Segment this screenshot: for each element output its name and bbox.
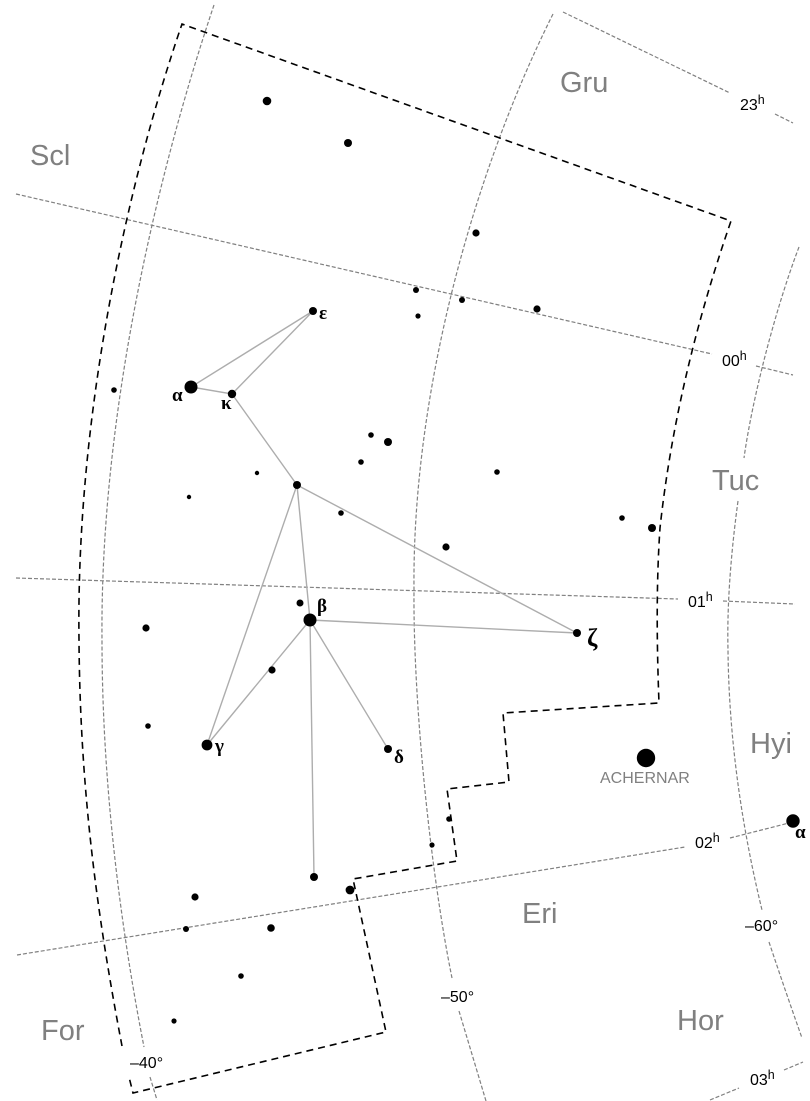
coordinate labels: 01 xyxy=(688,594,706,611)
Greek letter star labels: β xyxy=(317,596,327,617)
neighbouring constellation names: For xyxy=(41,1015,85,1047)
coordinate labels: –60° xyxy=(745,918,778,935)
Greek letter star labels: α xyxy=(172,385,183,406)
constellation boundary xyxy=(79,24,731,1093)
neighbouring constellation names: Tuc xyxy=(712,465,759,497)
star: alpha Hydri xyxy=(786,814,806,843)
coordinate labels: h xyxy=(758,93,765,107)
Greek letter star labels xyxy=(172,303,598,768)
neighbouring constellation names: Gru xyxy=(560,67,608,99)
Greek letter star labels: δ xyxy=(394,747,404,768)
coordinate labels: h xyxy=(713,831,720,845)
stars xyxy=(111,97,656,1024)
coordinate labels: 02 xyxy=(695,835,713,852)
star: Achernar with name: ACHERNAR xyxy=(600,770,690,787)
neighbouring constellation names: Eri xyxy=(522,898,557,930)
coordinate labels: –50° xyxy=(441,989,474,1006)
neighbouring constellation names: Scl xyxy=(30,140,70,172)
coordinate labels: h xyxy=(706,590,713,604)
star: alpha Hydri: α xyxy=(795,822,806,843)
Greek letter star labels: κ xyxy=(221,393,232,414)
neighbouring constellation names: Hyi xyxy=(750,728,792,760)
constellation figure lines xyxy=(191,311,577,877)
coordinate labels xyxy=(130,93,778,1089)
coordinate labels: 03 xyxy=(750,1072,768,1089)
neighbouring constellation names: Hor xyxy=(677,1005,724,1037)
Greek letter star labels: ζ xyxy=(587,625,598,652)
star: Achernar with name xyxy=(600,749,690,787)
coordinate labels: h xyxy=(768,1068,775,1082)
coordinate labels: –40° xyxy=(130,1055,163,1072)
coordinate labels: h xyxy=(740,349,747,363)
coordinate labels: 00 xyxy=(722,353,740,370)
Greek letter star labels: ε xyxy=(319,303,327,324)
coordinate labels: 23 xyxy=(740,97,758,114)
Greek letter star labels: γ xyxy=(214,736,224,757)
